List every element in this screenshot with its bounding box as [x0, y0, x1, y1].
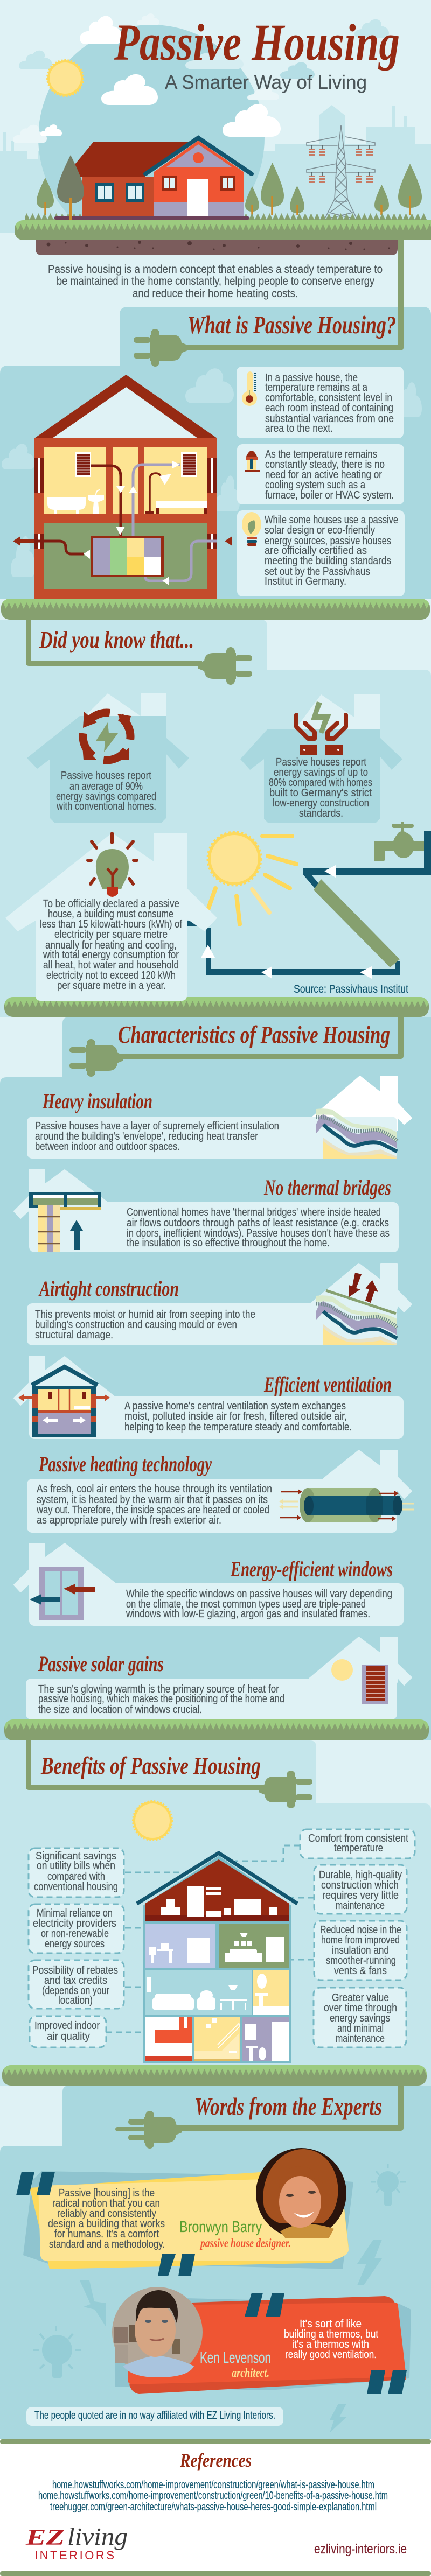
- item: efficient ventilation: moist, polluted inside air for fresh, filtered outside air,: [124, 1410, 347, 1422]
- house: [54, 138, 252, 220]
- fact: 80 percent savings: built to Germany's strict: [269, 787, 372, 799]
- fact: certification threshold: electricity per square metre: [54, 929, 168, 940]
- fact: certification threshold: [5, 833, 217, 1001]
- panel: what is passive housing: [0, 237, 431, 599]
- power cord and plug: [134, 237, 401, 367]
- quote: Bronwyn Barry: standard and a methodology.: [49, 2238, 165, 2250]
- bathroom and bedroom furniture: [47, 473, 207, 514]
- quotation marks: [245, 2293, 407, 2394]
- fact: 90 percent savings: Passive houses report: [61, 770, 151, 782]
- item: heavy insulation: Passive houses have a layer of supremely efficient insulation: [35, 1120, 279, 1132]
- card: no heating system: need for an active heating or: [265, 469, 382, 481]
- power cord and plug: [29, 616, 252, 685]
- card: certification: are officially certified as: [265, 545, 367, 557]
- room: office: [145, 1924, 215, 1968]
- ventilated house diagram: [18, 1367, 110, 1437]
- item: heavy insulation: around the building's 'envelope', reducing heat transfer: [35, 1131, 258, 1142]
- item: passive heating technology: Passive heating technology: [38, 1452, 212, 1476]
- quote: Bronwyn Barry: design a building that works: [48, 2218, 165, 2230]
- item: airtight construction: structural damage.: [35, 1329, 113, 1341]
- benefit: rebates: location): [58, 1995, 93, 2006]
- icon: energy bulb: [86, 833, 138, 897]
- panel: did you know: [0, 599, 431, 1017]
- room vents: [75, 452, 197, 477]
- item: efficient ventilation: A passive home's central ventilation system exchanges: [124, 1400, 346, 1412]
- ground band: [4, 997, 429, 1017]
- heading: Did you know that...: [39, 627, 194, 653]
- heading: Words from the Experts: [194, 2093, 382, 2120]
- benefit: minimal reliance: electricity providers: [33, 1918, 116, 1929]
- benefit: utility bills: conventional housing: [34, 1881, 118, 1893]
- references list: [38, 2479, 388, 2513]
- item: efficient ventilation: helping to keep the temperature steady and comfortable.: [124, 1421, 352, 1433]
- mechanical unit: [91, 536, 164, 577]
- item: heavy insulation: [27, 1076, 412, 1159]
- item: airtight construction: building's construction and causing mould or even: [35, 1319, 237, 1331]
- item: no thermal bridges: the insulation is so effective throughout the home.: [127, 1237, 330, 1249]
- hero illustration: [0, 13, 431, 255]
- card: temperature: temperature remains at a: [265, 382, 368, 394]
- benefit: reduced noise: [314, 1921, 407, 1980]
- benefit: comfort: [300, 1829, 415, 1858]
- item: energy-efficient windows: on the climate, the most common types used are triple-paned: [126, 1598, 366, 1610]
- item: energy-efficient windows: [14, 1543, 404, 1626]
- icon: large sun: [206, 832, 296, 924]
- item: passive solar gains: The sun's glowing warmth is the primary source of heat for: [38, 1683, 279, 1695]
- benefit: utility bills: compared with: [47, 1871, 105, 1883]
- solar panel: [314, 879, 400, 967]
- name: Ken Levenson: [200, 2349, 271, 2367]
- fact: certification threshold: electricity not to exceed 120 kWh: [46, 970, 176, 981]
- panel: benefits: [0, 1719, 431, 2086]
- item: passive solar gains: Passive solar gains: [38, 1652, 164, 1676]
- item: no thermal bridges: air flows outdoors through paths of least resistance (e.g. cracks: [127, 1217, 389, 1229]
- faint decorations: [33, 2164, 406, 2433]
- item: no thermal bridges: [14, 1170, 399, 1252]
- role: passive house designer.: [199, 2236, 291, 2250]
- intro text: Passive housing is a modern concept that enables a steady temperature to: [48, 263, 383, 276]
- logo: EZ Living Interiors: living: [67, 2523, 128, 2550]
- benefit: greater value: and minimal: [337, 2023, 384, 2034]
- item: airtight construction: [27, 1264, 412, 1345]
- card: no heating system: constantly steady, there is no: [265, 459, 385, 471]
- icon: hands holding energy: [296, 701, 346, 755]
- benefit: air quality: Improved indoor: [34, 2020, 100, 2032]
- gray tree: [57, 155, 84, 220]
- benefit: greater value: [314, 1988, 406, 2047]
- fact: 80 percent savings: 80% compared with homes: [269, 777, 372, 789]
- fact: certification threshold: house, a building must consume: [48, 908, 173, 920]
- card: temperature: each room instead of containing: [265, 402, 393, 414]
- benefit: rebates: [29, 1960, 124, 2009]
- benefit: rebates: Possibility of rebates: [32, 1964, 118, 1976]
- quote: Bronwyn Barry: radical notion that you can: [52, 2198, 160, 2209]
- trees: [37, 163, 422, 215]
- photo: Ken Levenson: [112, 2287, 203, 2377]
- quote: Bronwyn Barry: Passive [housing] is the: [59, 2187, 155, 2199]
- sun and window: [331, 1659, 388, 1704]
- card: certification: Institut in Germany.: [265, 575, 346, 587]
- power cord and plug: [115, 2083, 401, 2149]
- fact: certification threshold: annually for heating and cooling,: [45, 939, 177, 951]
- panel: words from the experts: [0, 2065, 431, 2439]
- icon: boiler: [245, 451, 260, 472]
- card: no heating system: [237, 444, 404, 504]
- bottom bar: [0, 2571, 431, 2576]
- cutaway house: [137, 1853, 297, 2063]
- beam and wall diagram: [29, 1192, 101, 1252]
- insulation layers: [316, 1108, 397, 1159]
- quote: Ken Levenson: [112, 2287, 411, 2394]
- benefit: durable: maintenance: [336, 1900, 385, 1912]
- benefit: reduced noise: vents & fans: [334, 1965, 387, 1977]
- fact: certification threshold: To be officially declared a passive: [43, 898, 179, 910]
- panel: characteristics: [0, 1014, 431, 1740]
- ground band: [2, 2065, 427, 2086]
- benefit: utility bills: [29, 1848, 124, 1897]
- icon: sun: [47, 60, 83, 96]
- item: efficient ventilation: [14, 1357, 404, 1439]
- item: passive heating technology: system, it is heated by the warm air that it passes on its: [37, 1494, 268, 1506]
- logo: EZ Living Interiors: [25, 2523, 128, 2562]
- fact: 80 percent savings: energy savings of up to: [274, 767, 368, 778]
- fact: 80 percent savings: Passive houses report: [276, 756, 366, 768]
- room: attic: [145, 1859, 289, 1921]
- room: living and dining: [145, 1970, 252, 2015]
- item: passive heating technology: [27, 1450, 414, 1533]
- fact: 80 percent savings: standards.: [299, 808, 343, 819]
- power cord and plug: [69, 1014, 401, 1077]
- footer divider: [0, 2439, 431, 2444]
- airflow arrows: [13, 461, 232, 585]
- quote: Ken Levenson: it's a thermos with: [292, 2339, 369, 2350]
- window diagram: [30, 1567, 95, 1620]
- item: passive solar gains: [26, 1637, 412, 1719]
- benefit: reduced noise: Reduced noise in the: [320, 1924, 401, 1936]
- fact: certification threshold: with total energy consumption for: [43, 949, 179, 961]
- intro text: and reduce their home heating costs.: [133, 287, 298, 300]
- card: no heating system: As the temperature remains: [265, 448, 377, 460]
- ground band: [4, 1719, 429, 1740]
- fact: certification threshold: all heat, hot water and household: [43, 959, 179, 971]
- fact: 90 percent savings: [27, 693, 189, 823]
- card: temperature: [237, 367, 404, 438]
- fact: 90 percent savings: with conventional homes.: [56, 801, 156, 812]
- power cord and plug: [29, 1739, 312, 1808]
- item: heavy insulation: Heavy insulation: [42, 1089, 152, 1113]
- house cross-section diagram: [13, 375, 232, 599]
- benefit: durable: construction which: [321, 1879, 399, 1891]
- benefit: reduced noise: home from improved: [321, 1934, 400, 1946]
- grass tufts: [25, 213, 427, 220]
- clouds: [13, 13, 389, 143]
- name: Bronwyn Barry: [179, 2219, 262, 2236]
- background circle: [38, 25, 265, 251]
- item: passive heating technology: way out. Therefore, the inside spaces are heated or cooled: [36, 1504, 269, 1516]
- card: no heating system: cooling system such as a: [265, 479, 366, 491]
- icon: tap: [374, 822, 424, 861]
- benefit: air quality: [30, 2016, 106, 2047]
- website: ezliving-interiors.ie: [314, 2542, 407, 2557]
- card: no heating system: furnace, boiler or HVAC system.: [265, 489, 394, 501]
- wall vents: [34, 458, 217, 549]
- card: certification: solar design or eco-friendly: [265, 524, 375, 536]
- benefit: durable: [314, 1865, 407, 1914]
- item: heavy insulation: between indoor and outdoor spaces.: [35, 1141, 180, 1153]
- solar water heating diagram: [187, 822, 431, 995]
- fact: 80 percent savings: low-energy construction: [273, 797, 369, 809]
- card: temperature: comfortable, consistent level in: [265, 392, 392, 404]
- water pipes: [187, 831, 431, 975]
- icon: sun: [133, 1801, 172, 1840]
- benefit: durable: Durable, high-quality: [319, 1869, 402, 1881]
- benefit: rebates: (depends on your: [42, 1985, 109, 1997]
- dashed connectors: [106, 1845, 314, 2032]
- item: no thermal bridges: No thermal bridges: [263, 1175, 391, 1199]
- insulation layers with arrows: [316, 1273, 397, 1345]
- benefit: durable: requires very little: [322, 1890, 399, 1901]
- benefit: greater value: maintenance: [336, 2033, 385, 2045]
- item: airtight construction: Airtight construction: [38, 1276, 179, 1301]
- quote: Ken Levenson: It's sort of like: [300, 2318, 362, 2330]
- intro text: [48, 263, 383, 300]
- item: passive solar gains: passive housing, which makes the positioning of the home and: [38, 1693, 284, 1705]
- benefit: minimal reliance: [29, 1904, 124, 1953]
- benefit: utility bills: Significant savings: [36, 1850, 116, 1862]
- flow arrows: [201, 865, 372, 979]
- benefit: comfort: Comfort from consistent: [308, 1833, 408, 1844]
- role: architect.: [232, 2366, 269, 2380]
- quote: Ken Levenson: building a thermos, but: [284, 2328, 378, 2340]
- fact: 80 percent savings: [240, 694, 402, 823]
- soil: [36, 240, 398, 255]
- room: bedroom: [219, 1924, 289, 1968]
- logo: EZ Living Interiors: INTERIORS: [34, 2549, 114, 2562]
- room: bathroom lower: [242, 2017, 289, 2061]
- disclaimer: The people quoted are in no way affiliated with EZ Living Interiors.: [34, 2410, 275, 2421]
- card: temperature: substantial variances from one: [265, 413, 394, 425]
- ducts: [20, 465, 217, 581]
- benefit: rebates: and tax credits: [44, 1975, 107, 1987]
- benefit: comfort: temperature: [334, 1842, 383, 1854]
- heat exchanger tube: [279, 1488, 414, 1522]
- item: no thermal bridges: Conventional homes have 'thermal bridges' where inside heated: [127, 1206, 381, 1218]
- item: passive heating technology: as appropriate purely with fresh exterior air.: [37, 1514, 221, 1526]
- item: passive solar gains: the size and location of windows crucial.: [38, 1704, 202, 1716]
- room: kitchen: [145, 2017, 192, 2061]
- benefit: air quality: air quality: [47, 2031, 90, 2042]
- item: energy-efficient windows: windows with low-E glazing, argon gas and insulated frames.: [126, 1608, 370, 1620]
- card: certification: energy sources, passive houses: [265, 535, 391, 547]
- fact: certification threshold: per square metre in a year.: [57, 980, 166, 992]
- quote: Bronwyn Barry: for humans. It's a comfort: [54, 2228, 159, 2240]
- background clouds: [2, 368, 422, 577]
- intro text: be maintained in the home constantly, helping people to conserve energy: [57, 275, 374, 287]
- heading: Benefits of Passive Housing: [40, 1752, 261, 1779]
- benefit: greater value: energy savings: [330, 2012, 390, 2024]
- item: airtight construction: This prevents moist or humid air from seeping into the: [35, 1309, 255, 1321]
- footer background: [0, 2439, 431, 2576]
- card: certification: meeting the building standards: [265, 555, 391, 567]
- icon: thermometer: [242, 371, 257, 406]
- fact: 90 percent savings: an average of 90%: [69, 781, 143, 792]
- subtitle: A Smarter Way of Living: [165, 71, 367, 93]
- card: temperature: In a passive house, the: [265, 372, 358, 384]
- photo: Bronwyn Barry: [256, 2148, 346, 2238]
- benefit: reduced noise: insulation and: [332, 1945, 389, 1956]
- card: certification: [237, 510, 405, 596]
- quote: Ken Levenson: really good ventilation.: [285, 2349, 377, 2361]
- benefit: greater value: over time through: [324, 2002, 397, 2014]
- benefit: minimal reliance: or non-renewable: [41, 1928, 109, 1940]
- room: stairs: [194, 2017, 240, 2061]
- fact: 90 percent savings: energy savings compared: [56, 791, 156, 803]
- source: Source: Passivhaus Institut: [294, 983, 408, 995]
- benefit: greater value: Greater value: [332, 1992, 389, 2004]
- quote: Bronwyn Barry: [16, 2148, 353, 2276]
- card: certification: set out by the Passivhaus: [265, 566, 370, 578]
- logo: EZ Living Interiors: EZ: [25, 2525, 65, 2550]
- card: temperature: area to the next.: [265, 423, 333, 434]
- benefit: utility bills: on utility bills when: [37, 1860, 115, 1872]
- quote: Bronwyn Barry: reliably and consistently: [57, 2208, 156, 2220]
- card: certification: While some houses use a passive: [265, 514, 398, 526]
- references heading: References: [179, 2449, 252, 2471]
- icon: leaf bulb: [242, 512, 261, 546]
- ground band: [15, 220, 431, 240]
- icon: energy cycle: [74, 704, 140, 769]
- room: bathroom upper: [253, 1970, 289, 2015]
- city skyline: [0, 105, 431, 233]
- disclaimer: [26, 2407, 283, 2426]
- ground band: [1, 599, 430, 620]
- item: passive heating technology: As fresh, cool air enters the house through its ventilation: [37, 1483, 272, 1495]
- benefit: reduced noise: smoother-running: [326, 1955, 396, 1967]
- benefit: minimal reliance: energy sources: [45, 1938, 105, 1950]
- pylon: [307, 125, 375, 220]
- quotation marks: [16, 2172, 195, 2276]
- fact: certification threshold: less than 15 kilowatt-hours (kWh) of: [40, 918, 182, 930]
- benefit: minimal reliance: Minimal reliance on: [37, 1907, 113, 1919]
